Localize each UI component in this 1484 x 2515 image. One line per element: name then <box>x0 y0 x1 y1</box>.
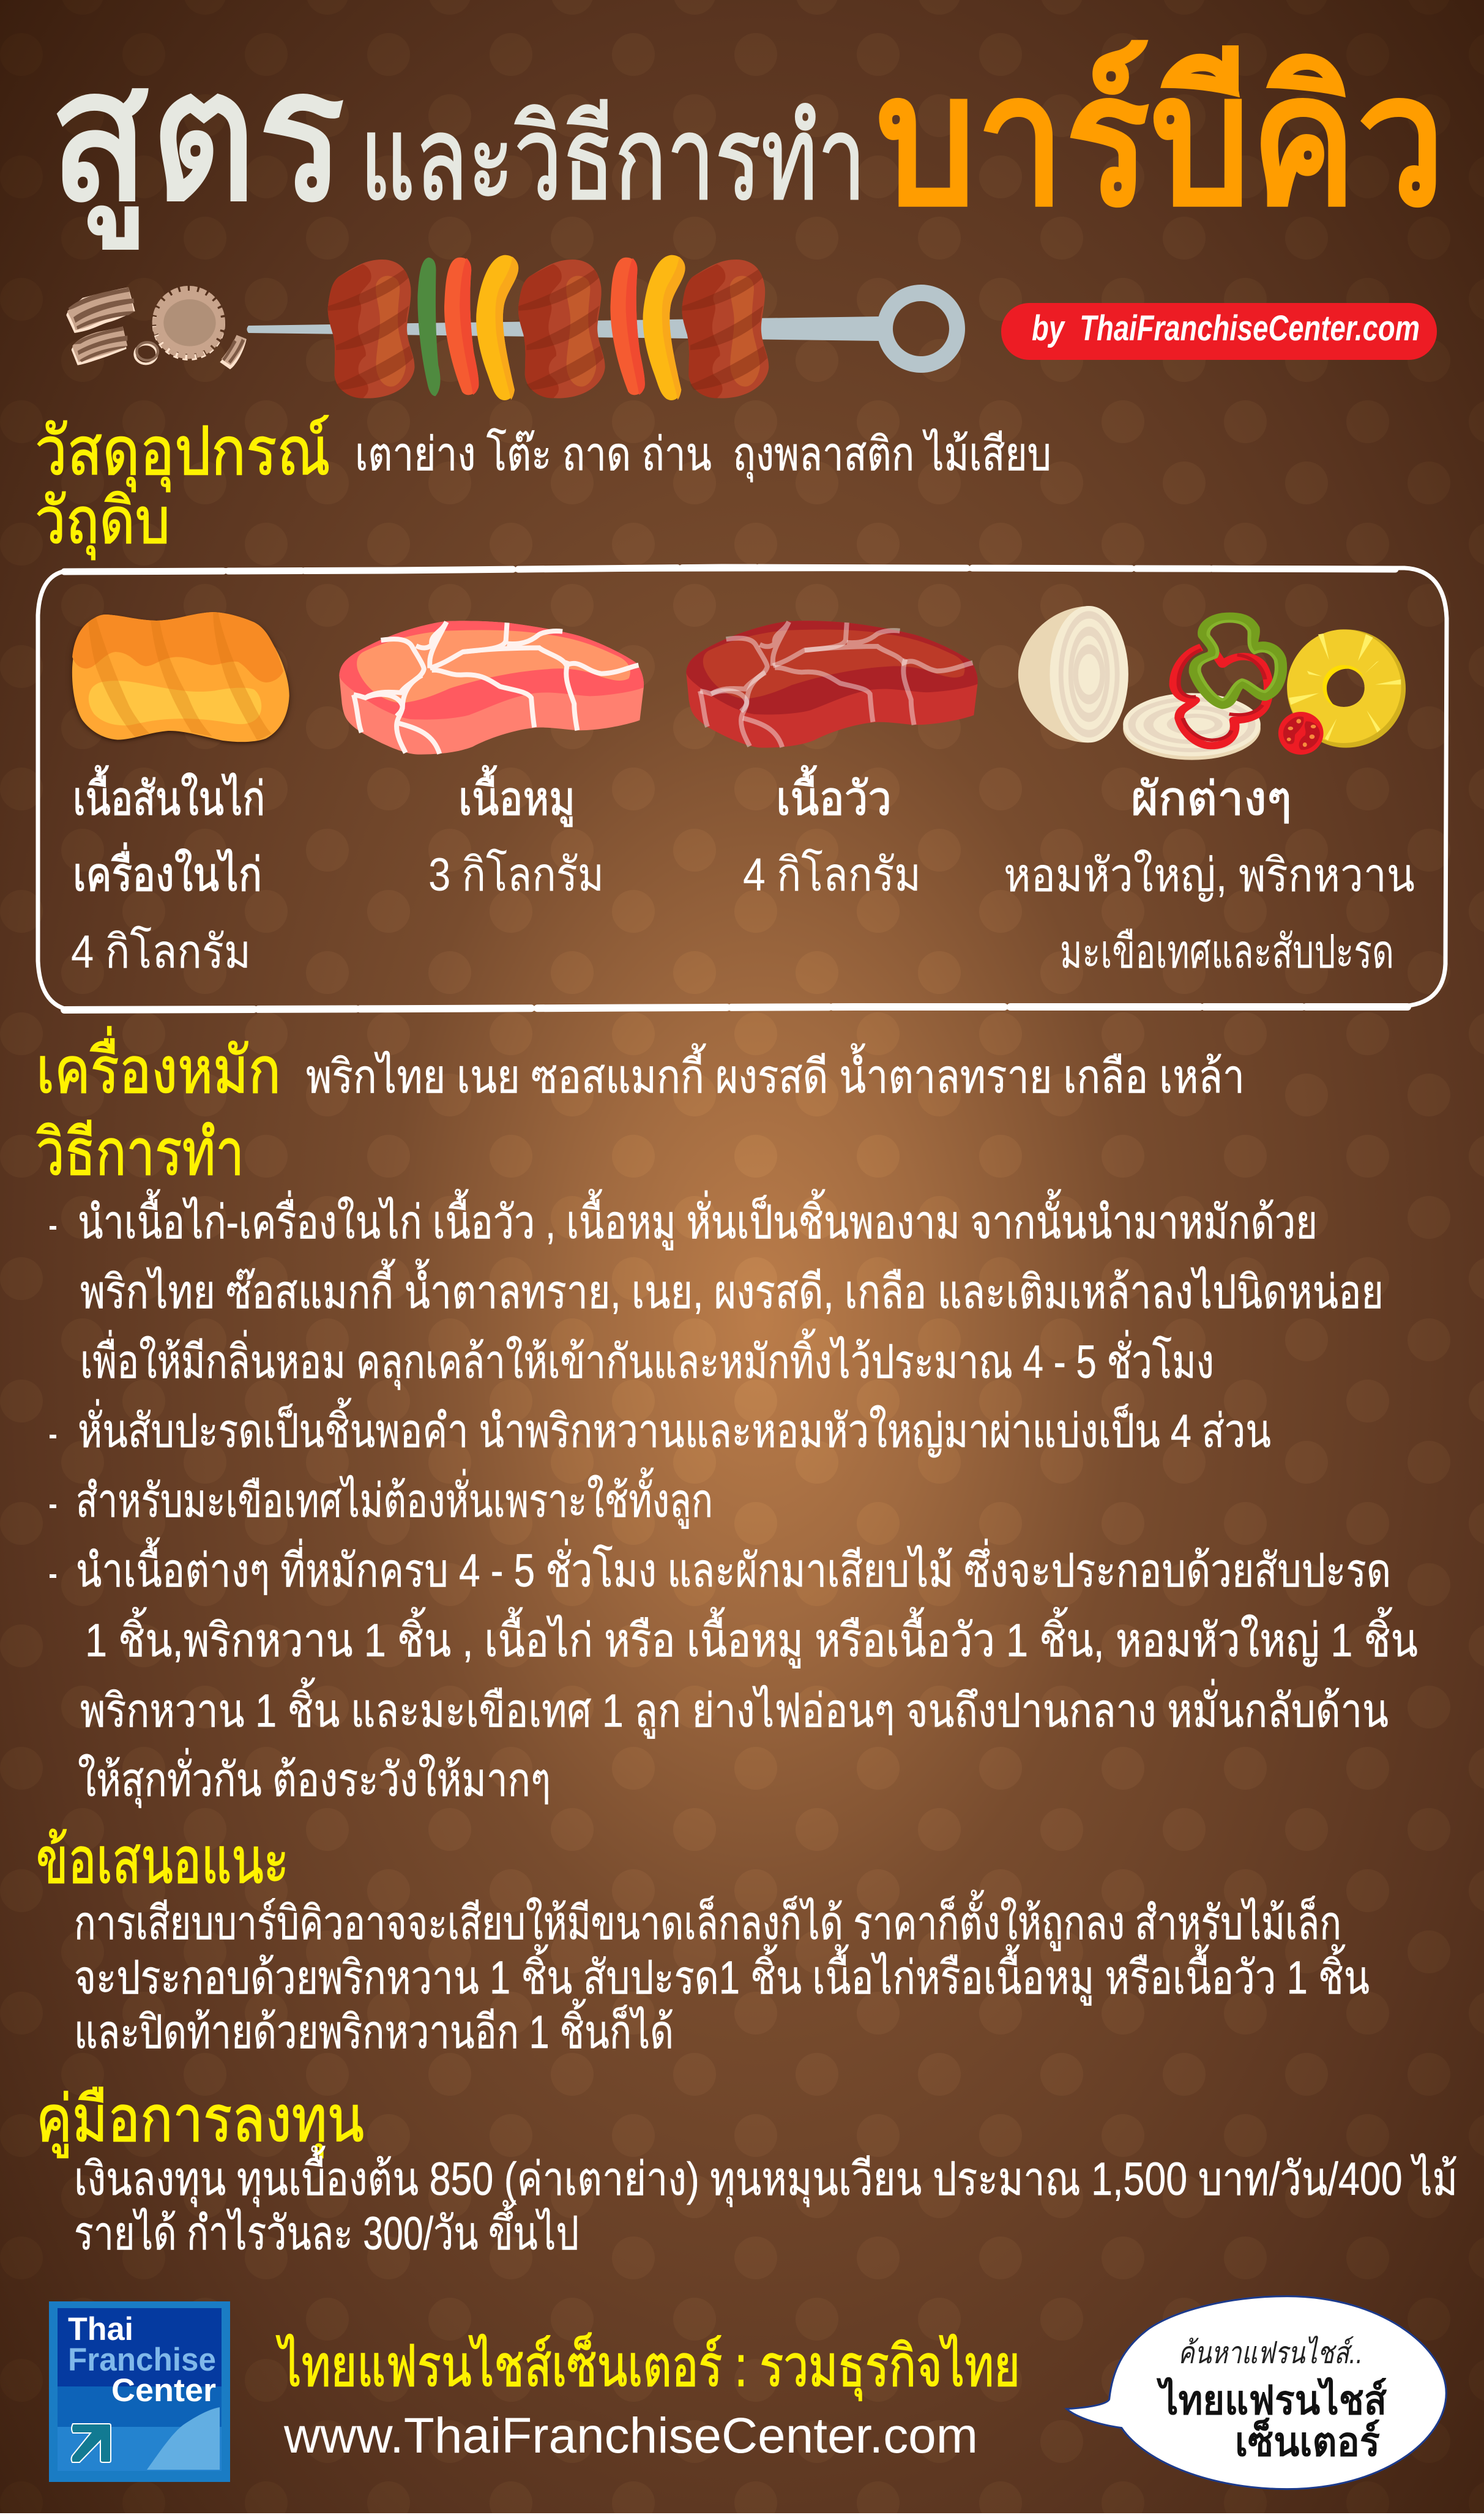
icon: cherry tomato <box>1278 712 1324 755</box>
illustration: meat scraps <box>66 287 247 369</box>
bubble script line: ค้นหาแฟรนไชส์.. <box>1178 2336 1363 2370</box>
icon: round scrap <box>155 289 222 357</box>
heading: method: วิธีการทำ <box>36 1117 244 1189</box>
label: chicken fillet: เนื้อสันในไก่ <box>73 765 265 825</box>
text block: suggestions <box>74 1889 1370 2058</box>
heading: equipment: วัสดุอุปกรณ์ <box>35 414 330 492</box>
text block: method steps <box>50 1189 1418 1808</box>
meat chunk 2 <box>518 260 605 398</box>
text: equipment list: เตาย่าง โต๊ะ ถาด ถ่าน ถุงพลาสติก ไม้เสียบ <box>355 428 1051 482</box>
label: vegetables: ผักต่างๆ <box>1131 773 1292 825</box>
step 1 line 3: เพื่อให้มีกลิ่นหอม คลุกเคล้าให้เข้ากันและหมักทิ้งไว้ประมาณ 4 - 5 ชั่วโมง <box>80 1328 1214 1390</box>
logo gradient panel <box>58 2308 222 2471</box>
bullet 2 <box>50 1435 56 1438</box>
icon: small strip <box>220 335 247 369</box>
bullet 3 <box>50 1504 56 1508</box>
logo word Center: Center <box>111 2372 216 2408</box>
text: marinade list: พริกไทย เนย ซอสแมกกี้ ผงรสดี น้ำตาลทราย เกลือ เหล้า <box>306 1043 1245 1103</box>
title: connecting words: และวิธีการทำ <box>360 94 866 224</box>
heading: investment guide: คู่มือการลงทุน <box>36 2083 364 2158</box>
bubble bold line 1: ไทยแฟรนไชส์ <box>1156 2377 1387 2423</box>
label: chicken offal: เครื่องในไก่ <box>73 843 262 901</box>
skewer ring <box>877 285 965 373</box>
badge pill <box>1001 303 1437 360</box>
icon: bacon strip upper <box>66 287 135 333</box>
bullet 4 <box>50 1574 56 1578</box>
red pepper <box>444 258 479 395</box>
heading: suggestions: ข้อเสนอแนะ <box>36 1825 289 1897</box>
illustration: skewer <box>247 255 965 400</box>
icon: vegetables <box>1018 606 1406 760</box>
amount: beef: 4 กิโลกรัม <box>743 848 921 901</box>
yellow pepper <box>476 255 518 400</box>
icon: pork steak <box>339 621 644 755</box>
title: recipe and method: สูตร <box>49 32 346 249</box>
label: pork: เนื้อหมู <box>458 765 575 827</box>
title <box>49 32 1445 249</box>
icon: green pepper ring <box>1194 616 1281 705</box>
text block: investment <box>74 2145 1458 2260</box>
footer: website: www.ThaiFranchiseCenter.com <box>283 2408 978 2464</box>
panel: ingredients <box>38 567 1447 1010</box>
icon: pineapple ring <box>1287 629 1406 748</box>
icon: small ring <box>135 344 157 364</box>
meat chunk 3 <box>682 260 769 398</box>
step 3: สำหรับมะเขือเทศไม่ต้องหั่นเพราะใช้ทั้งลูก <box>76 1467 713 1529</box>
amount: vegetables line 1: หอมหัวใหญ่, พริกหวาน <box>1004 849 1415 902</box>
icon: red pepper ring <box>1174 647 1269 746</box>
icon: beef steak <box>686 621 978 748</box>
meat chunk 1 <box>328 260 415 398</box>
green pepper <box>417 258 440 396</box>
icon: chicken fillet <box>72 612 289 742</box>
logo frame <box>49 2301 230 2482</box>
heading: marinade: เครื่องหมัก <box>36 1026 281 1107</box>
icon: onion slice <box>1123 693 1261 760</box>
red pepper 2 <box>610 258 645 395</box>
footer: company name: ไทยแฟรนไชส์เซ็นเตอร์ : รวมธุรกิจไทย <box>276 2332 1020 2401</box>
suggestions line 3: และปิดท้ายด้วยพริกหวานอีก 1 ชิ้นก็ได้ <box>74 1998 674 2058</box>
skewer rod <box>247 316 880 341</box>
logo word Thai: Thai <box>68 2311 133 2347</box>
logo wave <box>147 2407 220 2470</box>
amount: pork: 3 กิโลกรัม <box>428 848 604 901</box>
panel frame <box>38 567 1447 1010</box>
logo: Thai Franchise Center <box>49 2301 230 2482</box>
skewer food <box>328 255 769 400</box>
step 4 line 4: ให้สุกทั่วกัน ต้องระวังให้มากๆ <box>78 1748 551 1808</box>
label: beef: เนื้อวัว <box>776 765 892 825</box>
icon: small ring inner <box>136 342 158 361</box>
icon: bacon strip lower <box>72 326 127 365</box>
yellow pepper 2 <box>643 255 685 400</box>
byline badge <box>1001 303 1437 360</box>
bubble bold line 2: เซ็นเตอร์ <box>1235 2417 1380 2464</box>
bubble shape <box>1067 2296 1446 2489</box>
bullet 1 <box>50 1226 56 1230</box>
logo word Franchise: Franchise <box>68 2342 216 2378</box>
icon: onion half <box>1018 606 1128 742</box>
amount: chicken: 4 กิโลกรัม <box>71 925 251 978</box>
callout: speech bubble <box>1067 2296 1446 2489</box>
investment line 2: รายได้ กำไรวันละ 300/วัน ขึ้นไป <box>74 2200 579 2260</box>
heading: ingredients: วัถุดิบ <box>35 485 170 560</box>
logo arrow <box>71 2424 111 2462</box>
